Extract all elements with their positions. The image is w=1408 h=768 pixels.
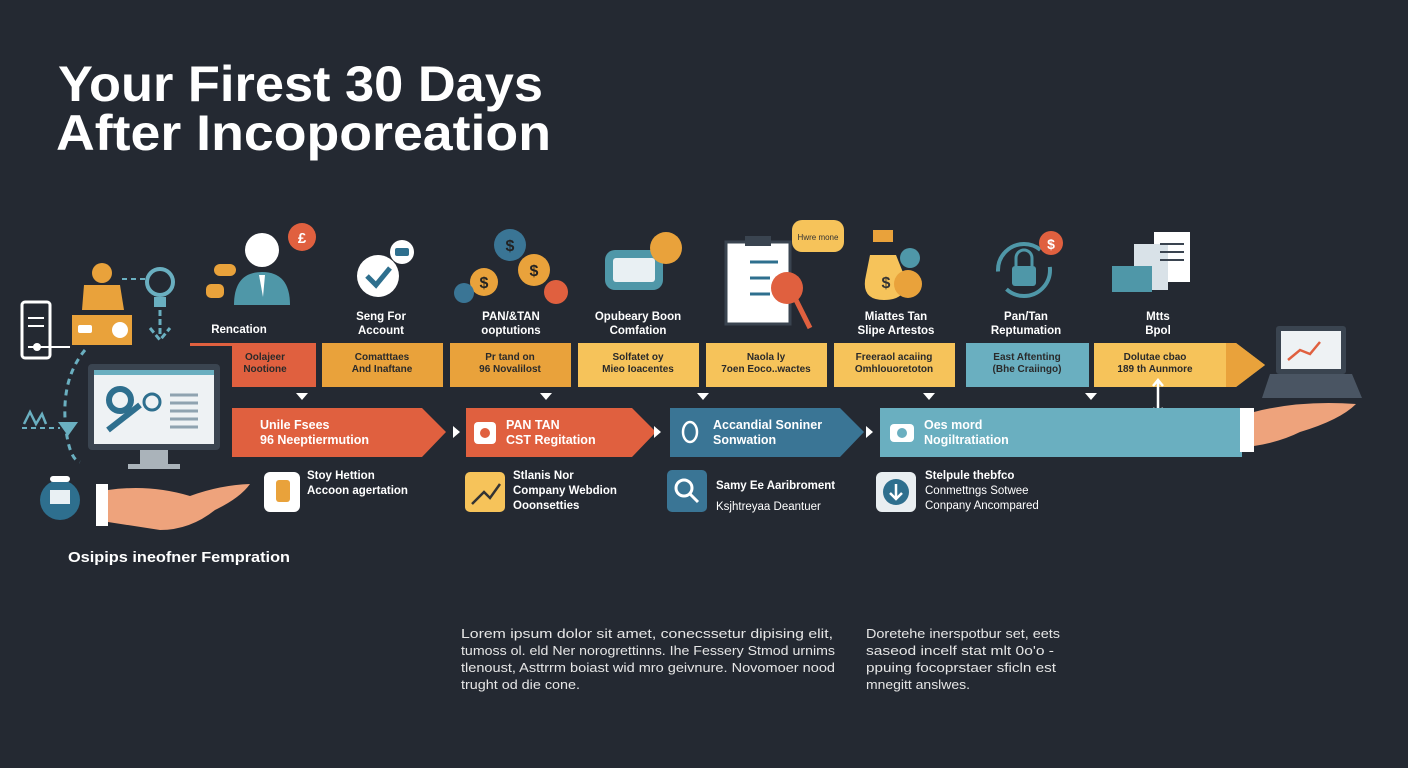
footer text left: tumoss ol. eld Ner norogrettinns. Ihe Fessery Stmod urnims	[461, 643, 836, 658]
title	[56, 56, 551, 161]
timeline top row boxes: Oolajeer	[245, 352, 285, 363]
top labels: Miattes Tan	[865, 311, 927, 323]
right hand with laptop	[1240, 326, 1362, 452]
icon: padlock: $	[1047, 236, 1055, 252]
footer text right: saseod incelf stat mlt 0o'o -	[866, 643, 1054, 658]
bottom step icons and texts: Company Webdion	[513, 485, 617, 497]
timeline bottom row arrows	[232, 408, 1242, 457]
timeline bottom row arrows: Accandial Soniner	[713, 418, 822, 432]
top labels: Mtts	[1146, 311, 1170, 323]
timeline top row boxes: Dolutae cbao	[1124, 352, 1186, 363]
bottom step icons and texts	[264, 470, 1039, 513]
left illustration cluster	[22, 263, 250, 530]
timeline bottom row arrows: PAN TAN	[506, 418, 560, 432]
icon: coins	[454, 229, 568, 304]
timeline bottom row arrows: Oes mord	[924, 418, 982, 432]
timeline top row boxes: And Inaftane	[352, 364, 413, 375]
bottom step icons and texts: Ksjhtreyaa Deantuer	[716, 501, 821, 513]
icon: phone checklist	[22, 302, 70, 358]
small down triangles	[296, 380, 1163, 414]
timeline top row boxes: Pr tand on	[485, 352, 535, 363]
icon: coins: $	[480, 275, 489, 292]
top labels: Comfation	[610, 325, 666, 337]
icon: pulse	[22, 412, 78, 436]
footer text left: Lorem ipsum dolor sit amet, conecssetur dipising elit,	[461, 626, 833, 641]
bottom step icons and texts: Samy Ee Aaribroment	[716, 480, 835, 492]
timeline top row boxes: Comatttaes	[355, 352, 410, 363]
timeline bottom row arrows: 96 Neeptiermution	[260, 433, 369, 447]
top labels: Pan/Tan	[1004, 311, 1048, 323]
top labels: Seng For	[356, 311, 406, 323]
timeline top row boxes: 96 Novalilost	[479, 364, 542, 375]
bottom step icons and texts: Stlanis Nor	[513, 470, 574, 482]
footer text right: mnegitt anslwes.	[866, 677, 970, 692]
timeline bottom row arrows: Sonwation	[713, 433, 776, 447]
icon: check circle	[357, 240, 414, 297]
timeline top row boxes: Naola ly	[747, 352, 786, 363]
icon: coins: $	[530, 263, 539, 280]
bottom step icons and texts: Conpany Ancompared	[925, 500, 1039, 512]
footer text right: Doretehe inerspotbur set, eets	[866, 626, 1061, 641]
icon: coins: $	[506, 238, 515, 255]
caption: Osipips ineofner Fempration	[68, 549, 290, 566]
icon: monitor	[88, 364, 220, 469]
top labels: Bpol	[1145, 325, 1171, 337]
timeline top row boxes: Omhlouoretoton	[855, 364, 933, 375]
timeline top row boxes: Solfatet oy	[612, 352, 664, 363]
icon: person speech	[206, 223, 316, 305]
dashed curve	[65, 350, 85, 462]
icon: documents	[1112, 232, 1190, 292]
timeline top row boxes	[190, 343, 1265, 387]
footer text left	[461, 626, 836, 692]
icon: money bags	[865, 230, 922, 300]
timeline bottom row arrows: Nogiltratiation	[924, 433, 1009, 447]
title: After Incoporeation	[56, 105, 551, 161]
timeline bottom row arrows: CST Regitation	[506, 433, 596, 447]
timeline top row boxes: 189 th Aunmore	[1117, 364, 1193, 375]
icon: money bags: $	[882, 275, 891, 292]
bottom step icons and texts: Accoon agertation	[307, 485, 408, 497]
top labels: Opubeary Boon	[595, 311, 681, 323]
title: Your Firest 30 Days	[58, 56, 543, 112]
icon: padlock	[998, 231, 1063, 296]
timeline bottom row arrows: Unile Fsees	[260, 418, 330, 432]
top labels: Slipe Artestos	[858, 325, 934, 337]
bottom step icons and texts: Stelpule thebfco	[925, 470, 1014, 482]
icon: bag	[40, 476, 80, 520]
icon: chat money	[605, 232, 682, 290]
icon: clipboard	[726, 220, 844, 328]
icon: person speech: £	[298, 230, 307, 247]
timeline top row boxes: Freeraol acaiing	[856, 352, 932, 363]
bottom step icons and texts: Ooonsetties	[513, 500, 579, 512]
footer text left: trught od die cone.	[461, 677, 580, 692]
top labels: PAN/&TAN	[482, 311, 540, 323]
top labels: Rencation	[211, 324, 267, 336]
icon: clipboard: Hwre mone	[798, 233, 839, 242]
icon: person at desk	[72, 263, 132, 345]
timeline top row boxes: (Bhe Craiingo)	[993, 364, 1061, 375]
step icons top row	[206, 220, 1190, 328]
icon: bulb	[122, 269, 173, 340]
bottom step icons and texts: Conmettngs Sotwee	[925, 485, 1029, 497]
top labels: Account	[358, 325, 404, 337]
timeline top row boxes: East Aftenting	[993, 352, 1061, 363]
footer text right: ppuing focoprstaer sficln est	[866, 660, 1056, 675]
footer text left: tlenoust, Asttrrm boiast wid mro geivnure. Novomoer nood	[461, 660, 835, 675]
footer text right	[866, 626, 1061, 692]
icon: hand	[96, 484, 250, 530]
top labels	[211, 311, 1171, 337]
top labels: ooptutions	[481, 325, 541, 337]
timeline top row boxes: Mieo Ioacentes	[602, 364, 674, 375]
bottom step icons and texts: Stoy Hettion	[307, 470, 375, 482]
timeline top row boxes: Nootione	[243, 364, 287, 375]
top labels: Reptumation	[991, 325, 1061, 337]
timeline top row boxes: 7oen Eoco..wactes	[721, 364, 811, 375]
